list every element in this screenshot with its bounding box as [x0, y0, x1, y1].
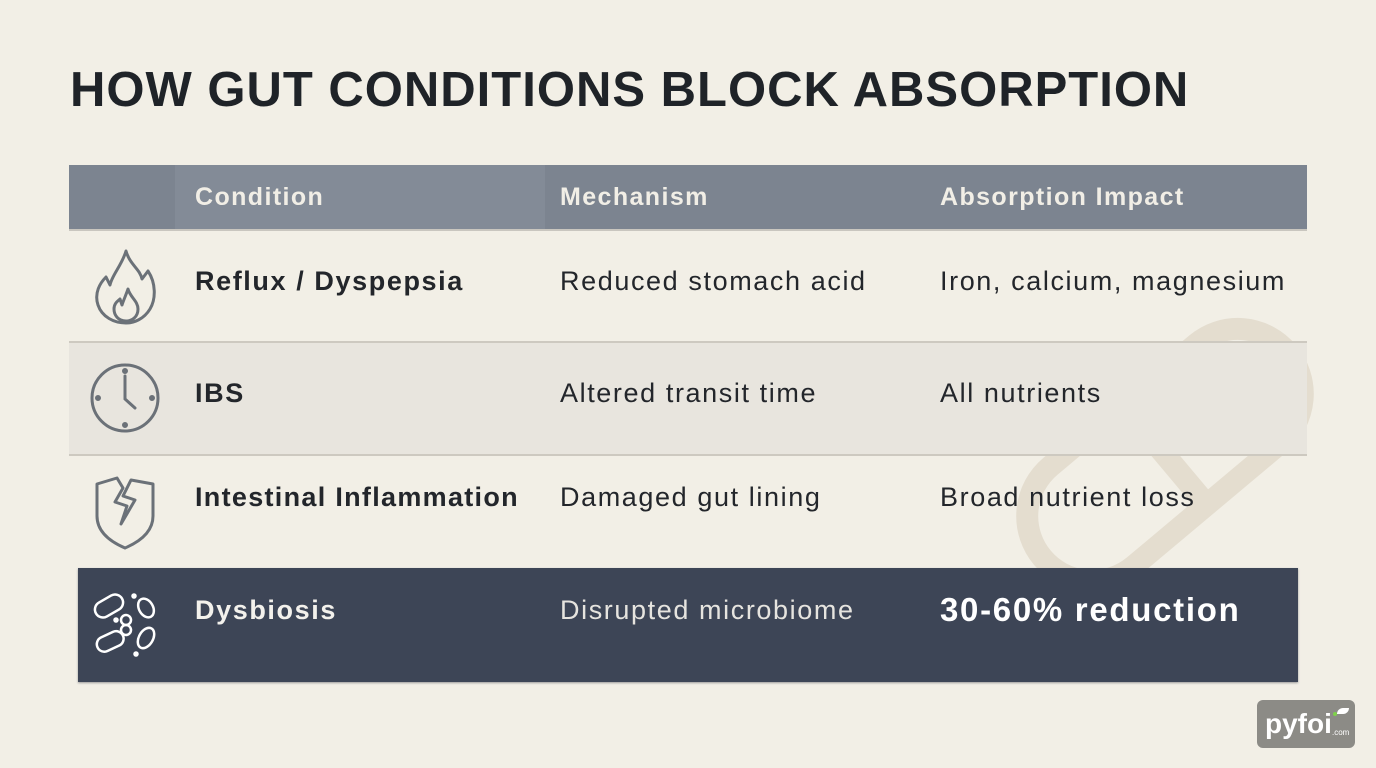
row: reflux: Reflux / Dyspepsia	[195, 266, 464, 296]
logo: pyfoi: pyfoi	[1265, 708, 1332, 739]
table header	[69, 165, 1307, 231]
table header: Absorption Impact	[940, 183, 1185, 211]
row: reflux: Reduced stomach acid	[560, 266, 867, 296]
row: inflammation: Broad nutrient loss	[940, 482, 1196, 512]
row: dysbiosis (highlighted): Dysbiosis	[195, 595, 337, 625]
icon: flame	[95, 250, 156, 324]
row: dysbiosis (highlighted): Disrupted microbiome	[560, 595, 855, 625]
row: reflux	[69, 231, 1307, 343]
row: IBS	[69, 343, 1307, 456]
row: inflammation	[96, 476, 1196, 550]
table header: Condition	[195, 183, 324, 211]
watermark: capsule	[1016, 318, 1314, 568]
row: inflammation: Intestinal Inflammation	[195, 482, 519, 512]
row: IBS: All nutrients	[940, 378, 1102, 408]
row: reflux: Iron, calcium, magnesium	[940, 266, 1286, 296]
row: dysbiosis (highlighted): 30-60% reduction	[940, 591, 1240, 628]
table header: Mechanism	[560, 183, 709, 211]
row: IBS: Altered transit time	[560, 378, 817, 408]
row: inflammation: Damaged gut lining	[560, 482, 821, 512]
icon: broken shield	[96, 476, 154, 550]
logo: pyfoi	[1257, 700, 1355, 748]
row: dysbiosis (highlighted)	[78, 568, 1298, 682]
icon: microbes	[94, 593, 156, 657]
icon: clock	[90, 364, 160, 432]
row: IBS: IBS	[195, 378, 245, 408]
logo: pyfoi: .com	[1332, 728, 1349, 737]
title: HOW GUT CONDITIONS BLOCK ABSORPTION	[70, 63, 1189, 117]
